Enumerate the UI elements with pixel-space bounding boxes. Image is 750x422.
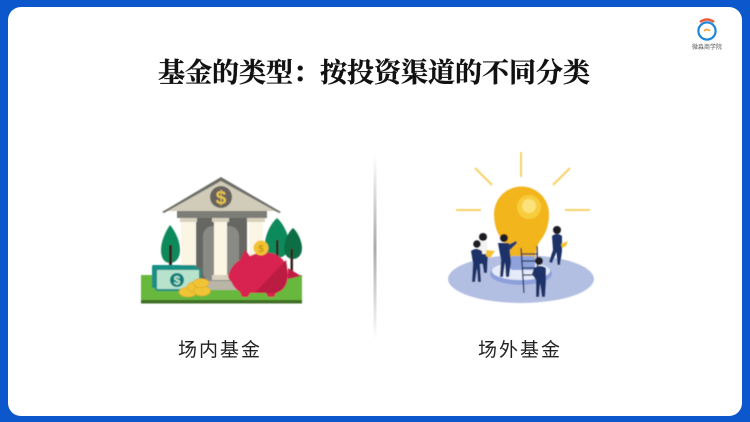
entablature <box>177 211 267 218</box>
icon: academy logo: 微淼商学院 <box>692 43 722 51</box>
piggy bank: $ <box>258 244 264 255</box>
banknotes <box>152 265 200 290</box>
rays <box>456 152 590 210</box>
left tree <box>161 225 180 267</box>
piggy bank <box>228 240 301 297</box>
icon: bank with piggy bank <box>141 177 302 304</box>
dollar medallion <box>210 186 232 208</box>
label: on-exchange funds: 场内基金 <box>178 340 262 361</box>
bank body: $ <box>216 188 227 209</box>
title: 基金的类型：按投资渠道的不同分类 <box>158 58 590 88</box>
person: left pair <box>471 233 495 282</box>
divider: central vertical line <box>374 155 376 340</box>
platform <box>448 255 594 303</box>
person: center <box>498 234 517 277</box>
label: off-exchange funds: 场外基金 <box>478 340 562 361</box>
columns <box>181 222 196 276</box>
base step <box>200 281 244 290</box>
pediment <box>165 180 277 211</box>
ladder <box>521 246 538 293</box>
person: front <box>532 257 546 297</box>
person: right <box>549 226 568 265</box>
right trees <box>265 218 302 277</box>
banknotes: $ <box>174 274 181 288</box>
bulb <box>494 186 549 262</box>
grass <box>141 275 302 301</box>
icon: light bulb with team <box>448 152 594 303</box>
icon: academy logo <box>692 20 722 51</box>
bank body <box>162 177 281 290</box>
coins <box>179 278 210 297</box>
